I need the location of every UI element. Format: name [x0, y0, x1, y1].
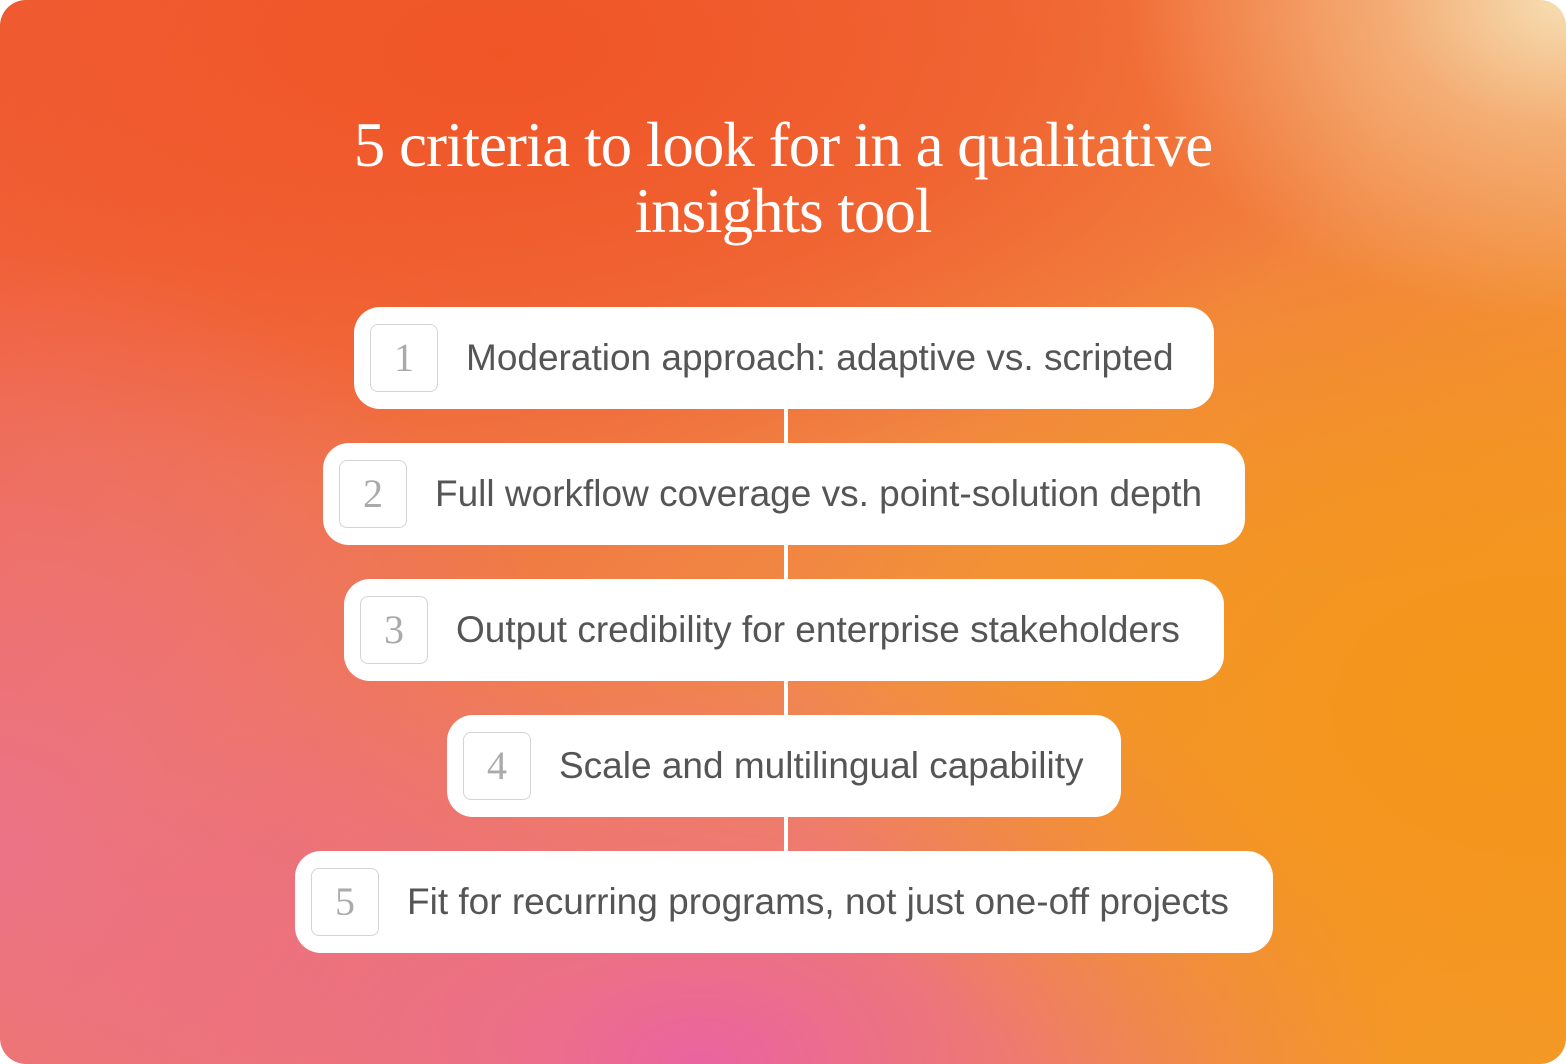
card 2: Full workflow coverage vs. point-solution depth [435, 473, 1202, 514]
card 5 [295, 851, 1273, 953]
title: 5 criteria to look for in a qualitative [354, 110, 1212, 180]
title [354, 110, 1212, 246]
card 4: 4 [487, 743, 507, 788]
card 1 [354, 307, 1214, 409]
card 3: 3 [384, 607, 404, 652]
title: insights tool [635, 176, 931, 246]
card 4 [447, 715, 1121, 817]
card 1: 1 [394, 335, 414, 380]
card 2 [323, 443, 1245, 545]
card 3 [344, 579, 1224, 681]
card 5: 5 [335, 879, 355, 924]
card 1: Moderation approach: adaptive vs. scripted [466, 337, 1174, 378]
card 5: Fit for recurring programs, not just one-off projects [407, 881, 1229, 922]
card 2: 2 [363, 471, 383, 516]
card 4: Scale and multilingual capability [559, 745, 1083, 786]
card 3: Output credibility for enterprise stakeholders [456, 609, 1180, 650]
